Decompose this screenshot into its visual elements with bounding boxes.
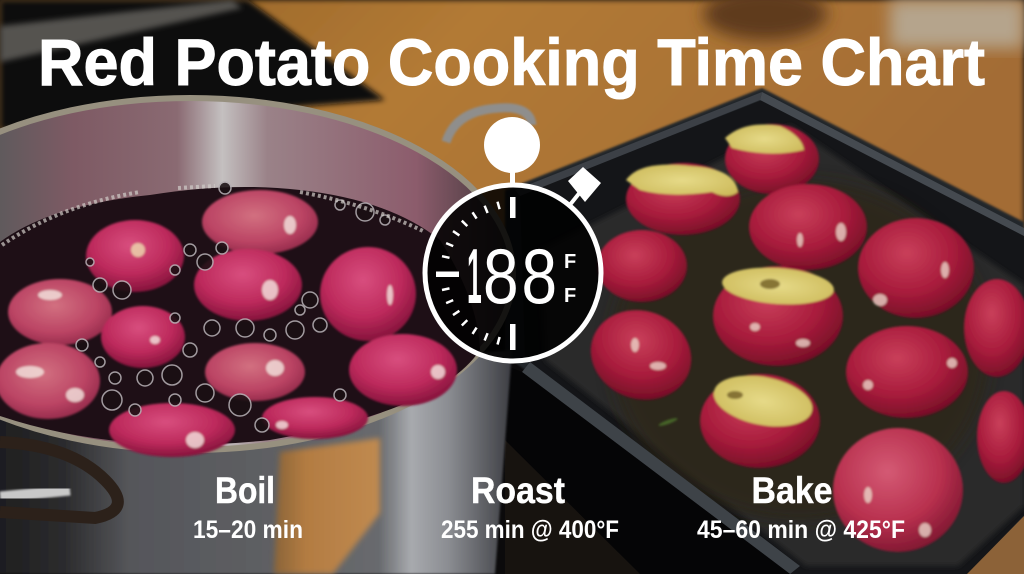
timer side button <box>568 167 601 206</box>
tray floor <box>540 125 1024 566</box>
foam bubbles <box>76 182 390 432</box>
tray outer side <box>505 365 790 574</box>
method: bake <box>697 470 905 544</box>
whole potatoes on tray <box>578 184 1024 552</box>
method: roast <box>441 470 619 544</box>
method: bake: 45–60 min @ 425°F <box>697 516 905 544</box>
pot rim <box>0 98 513 450</box>
method: roast: Roast <box>471 470 565 511</box>
unit letters <box>564 251 576 307</box>
back handle of pot <box>446 108 532 142</box>
copper reflection <box>274 438 380 574</box>
title: Red Potato Cooking Time Chart <box>38 25 985 99</box>
boiling potatoes <box>0 190 457 457</box>
pot inner wall <box>0 98 513 450</box>
method: boil: 15–20 min <box>193 516 303 544</box>
method: boil <box>193 470 303 544</box>
timer readout: 88 <box>483 233 557 320</box>
tray potatoes <box>578 124 1024 552</box>
timer stem <box>510 172 515 186</box>
timer major ticks <box>436 197 516 350</box>
method: bake: Bake <box>752 470 832 511</box>
unit letters: F <box>564 251 576 273</box>
water <box>0 187 480 445</box>
boiling potato highlights <box>16 216 445 448</box>
pot body <box>0 350 512 574</box>
method: roast: 255 min @ 400°F <box>441 516 619 544</box>
tray scattered herbs <box>658 279 780 427</box>
timer icon <box>425 117 601 361</box>
foam edge along pot wall <box>2 186 425 245</box>
pot side handle <box>0 442 118 518</box>
unit letters: F <box>564 285 576 307</box>
potato halves on tray <box>626 124 843 468</box>
method: boil: Boil <box>215 470 275 511</box>
tray front rim <box>522 362 800 574</box>
timer dial face <box>425 185 601 361</box>
timer readout: 1 <box>467 233 482 320</box>
sheet pan tray <box>505 88 1024 574</box>
timer top button <box>484 117 540 173</box>
steel pot <box>0 98 513 574</box>
timer ring <box>425 185 601 361</box>
timer minor ticks <box>442 202 500 344</box>
tray potato highlights <box>631 223 957 537</box>
